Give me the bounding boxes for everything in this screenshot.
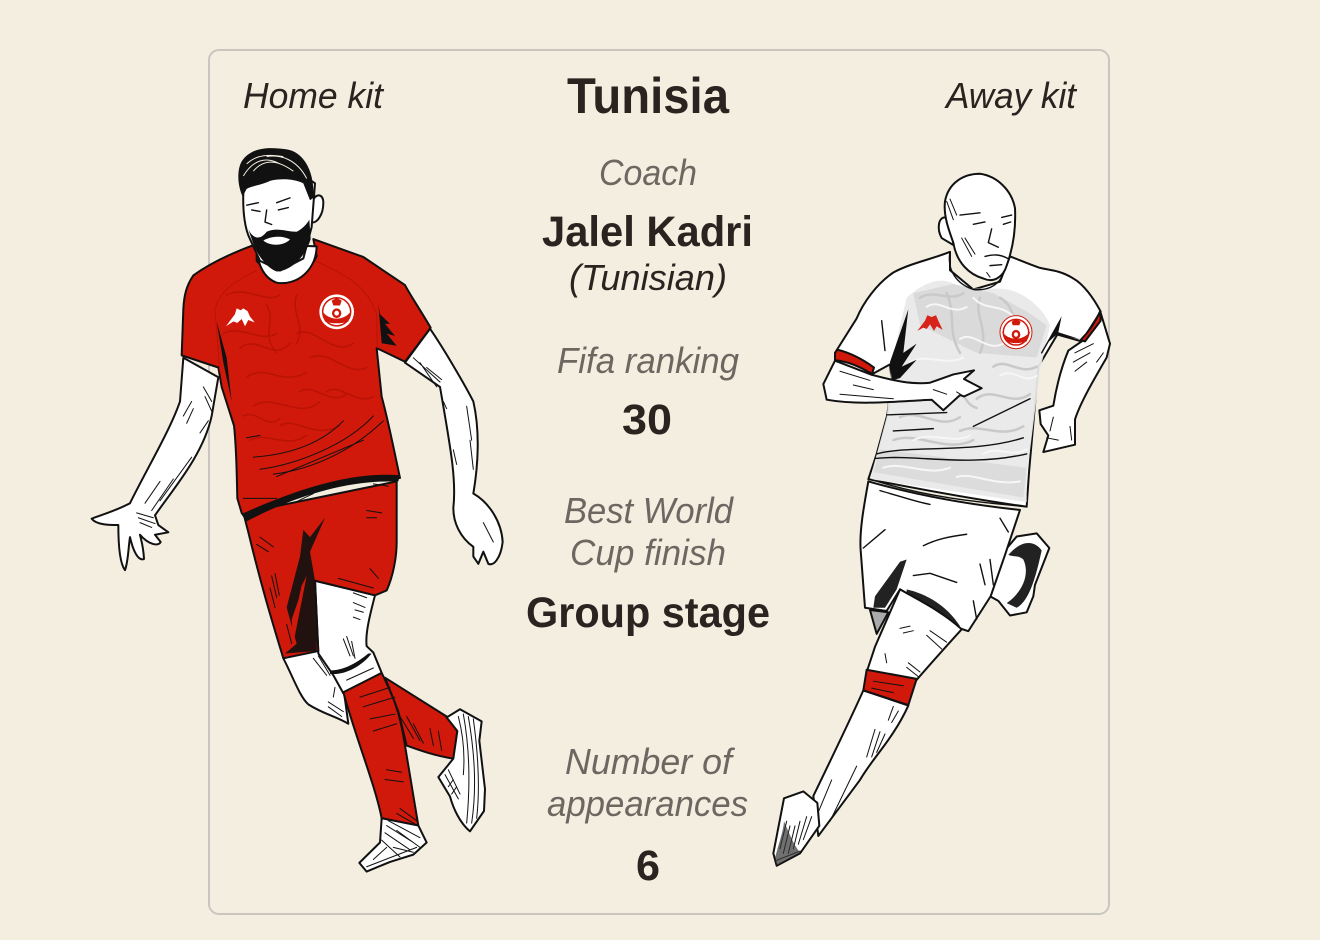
best world cup finish block: Best World [564, 490, 734, 531]
shirt folds and shadow [243, 416, 383, 498]
shorts folds and shadow [863, 491, 1008, 619]
far arm [1039, 311, 1110, 452]
number of appearances block: 6 [636, 842, 660, 890]
beard [248, 220, 311, 272]
away kit label: Away kit [944, 75, 1078, 116]
federation badge [319, 294, 354, 329]
back boot [438, 709, 485, 831]
back sock [385, 678, 457, 759]
arm shading [1047, 344, 1103, 440]
near arm and pointing hand [823, 361, 982, 410]
face details [960, 213, 1012, 266]
shirt [835, 252, 1101, 507]
thigh and knee [867, 589, 962, 680]
best world cup finish block [526, 490, 770, 637]
shirt [182, 239, 431, 520]
far boot [990, 533, 1049, 616]
face [243, 164, 315, 271]
number of appearances block [547, 741, 748, 890]
panel frame [209, 50, 1109, 914]
fifa ranking block: Fifa ranking [557, 340, 739, 381]
front sock [343, 673, 418, 826]
red sock band [863, 670, 917, 705]
kappa logo [226, 308, 255, 326]
shorts [860, 481, 1020, 631]
sock shading [360, 687, 442, 824]
shirt pattern [223, 292, 373, 441]
kappa logo [917, 315, 943, 331]
home kit label: Home kit [243, 75, 385, 116]
title: Tunisia [567, 68, 730, 124]
front boot [773, 791, 819, 866]
leg shading [818, 626, 947, 821]
neck [949, 252, 1002, 290]
shorts [243, 481, 397, 658]
hair [238, 148, 313, 200]
away kit player illustration [773, 174, 1110, 866]
leg shading [313, 593, 377, 716]
back leg [283, 649, 348, 724]
coach block: (Tunisian) [569, 257, 727, 298]
ear [311, 195, 323, 222]
lower leg [813, 690, 908, 836]
coach block [542, 152, 753, 298]
front boot shading [777, 817, 812, 860]
right arm [405, 329, 503, 564]
fifa ranking block [557, 340, 739, 444]
front boot [359, 818, 427, 872]
coach block: Coach [599, 152, 697, 193]
neck [257, 244, 317, 283]
shorts folds [257, 510, 382, 644]
left hand and arm shading [137, 358, 493, 542]
number of appearances block: Number of [565, 741, 736, 782]
front boot shading [367, 821, 420, 867]
coach block: Jalel Kadri [542, 208, 753, 256]
shirt folds [870, 321, 1060, 507]
shorts shadow [285, 518, 325, 653]
best world cup finish block: Group stage [526, 589, 770, 637]
front leg thigh [315, 581, 382, 693]
eyes and nose [247, 198, 290, 225]
near arm shading [840, 371, 964, 399]
home kit player illustration [92, 148, 503, 872]
number of appearances block: appearances [547, 783, 748, 824]
far sleeve cuff [1081, 312, 1101, 341]
shirt grey pattern [870, 281, 1050, 502]
under shorts sliver [870, 610, 888, 634]
left arm [92, 358, 218, 570]
back boot shading [445, 714, 478, 823]
head [945, 174, 1015, 280]
fifa ranking block: 30 [622, 396, 672, 444]
best world cup finish block: Cup finish [570, 532, 726, 573]
raglan seams [215, 261, 377, 372]
federation badge [1000, 316, 1032, 349]
ear [939, 217, 953, 245]
near sleeve cuff [835, 350, 874, 374]
